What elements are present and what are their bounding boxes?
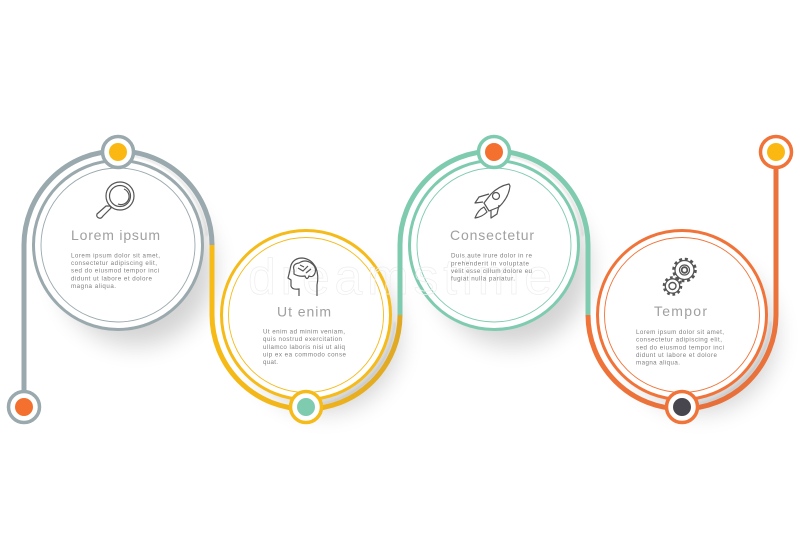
text block: step 4: consectetur adipiscing elit, — [636, 336, 722, 344]
text block: step 2: ullamco laboris nisi ut aliq — [263, 344, 346, 351]
text block: step 4: magna aliqua. — [636, 360, 680, 366]
icon: gears — [664, 259, 696, 295]
panel: step 3 circle — [410, 160, 578, 330]
text block: step 3 — [451, 252, 533, 282]
text block: step 1 — [71, 252, 160, 290]
timeline path: yellow segment — [212, 245, 400, 409]
text block: step 2 — [263, 328, 347, 366]
text block: step 1: sed do eiusmod tempor inci — [71, 268, 159, 275]
panel: step 4 circle — [598, 230, 766, 400]
node: end — [760, 136, 792, 168]
text block: step 4: sed do eiusmod tempor inci — [636, 344, 724, 352]
node: step 2 — [290, 392, 322, 422]
node: step 1 — [102, 136, 134, 168]
heading: Ut enim: Ut enim — [277, 304, 331, 320]
panel: step 1 circle — [34, 160, 202, 330]
text block: step 1: magna aliqua. — [71, 283, 116, 290]
text block: step 4 — [636, 329, 724, 366]
panel: step 2 circle — [222, 230, 390, 400]
text block: step 1: Lorem ipsum dolor sit amet, — [71, 252, 160, 260]
timeline path: green segment — [400, 151, 588, 315]
icon: head with brain — [288, 258, 318, 296]
text block: step 2: quis nostrud exercitation — [263, 336, 343, 343]
arc shadows — [134, 156, 771, 404]
timeline path: grey segment — [24, 151, 212, 395]
text block: step 3: velit esse cillum dolore eu — [451, 268, 533, 275]
text block: step 2: quat. — [263, 359, 278, 366]
watermark: dreamstime — [248, 249, 552, 305]
icon: rocket — [475, 184, 510, 218]
timeline path: orange segment — [588, 165, 776, 409]
text block: step 4: Lorem ipsum dolor sit amet, — [636, 329, 724, 336]
drop shadows — [58, 190, 776, 412]
text block: step 3: Duis aute irure dolor in re — [451, 252, 533, 260]
text block: step 4: didunt ut labore et dolore — [636, 352, 718, 359]
heading: Lorem ipsum: Lorem ipsum — [71, 227, 160, 243]
heading: Consectetur: Consectetur — [450, 227, 534, 243]
text block: step 1: didunt ut labore et dolore — [71, 275, 153, 282]
text block: step 3: prehenderit in voluptate — [451, 260, 530, 268]
node: step 4 — [666, 392, 698, 422]
text block: step 2: Ut enim ad minim veniam, — [263, 328, 345, 336]
text block: step 1: consectetur adipiscing elit, — [71, 260, 157, 267]
text block: step 3: fugiat nulla pariatur. — [451, 276, 515, 282]
node: step 3 — [478, 136, 510, 168]
heading: Tempor: Tempor — [654, 303, 707, 319]
node: start — [8, 392, 40, 422]
icon: magnifier — [97, 182, 134, 218]
text block: step 2: uip ex ea commodo conse — [263, 352, 347, 358]
